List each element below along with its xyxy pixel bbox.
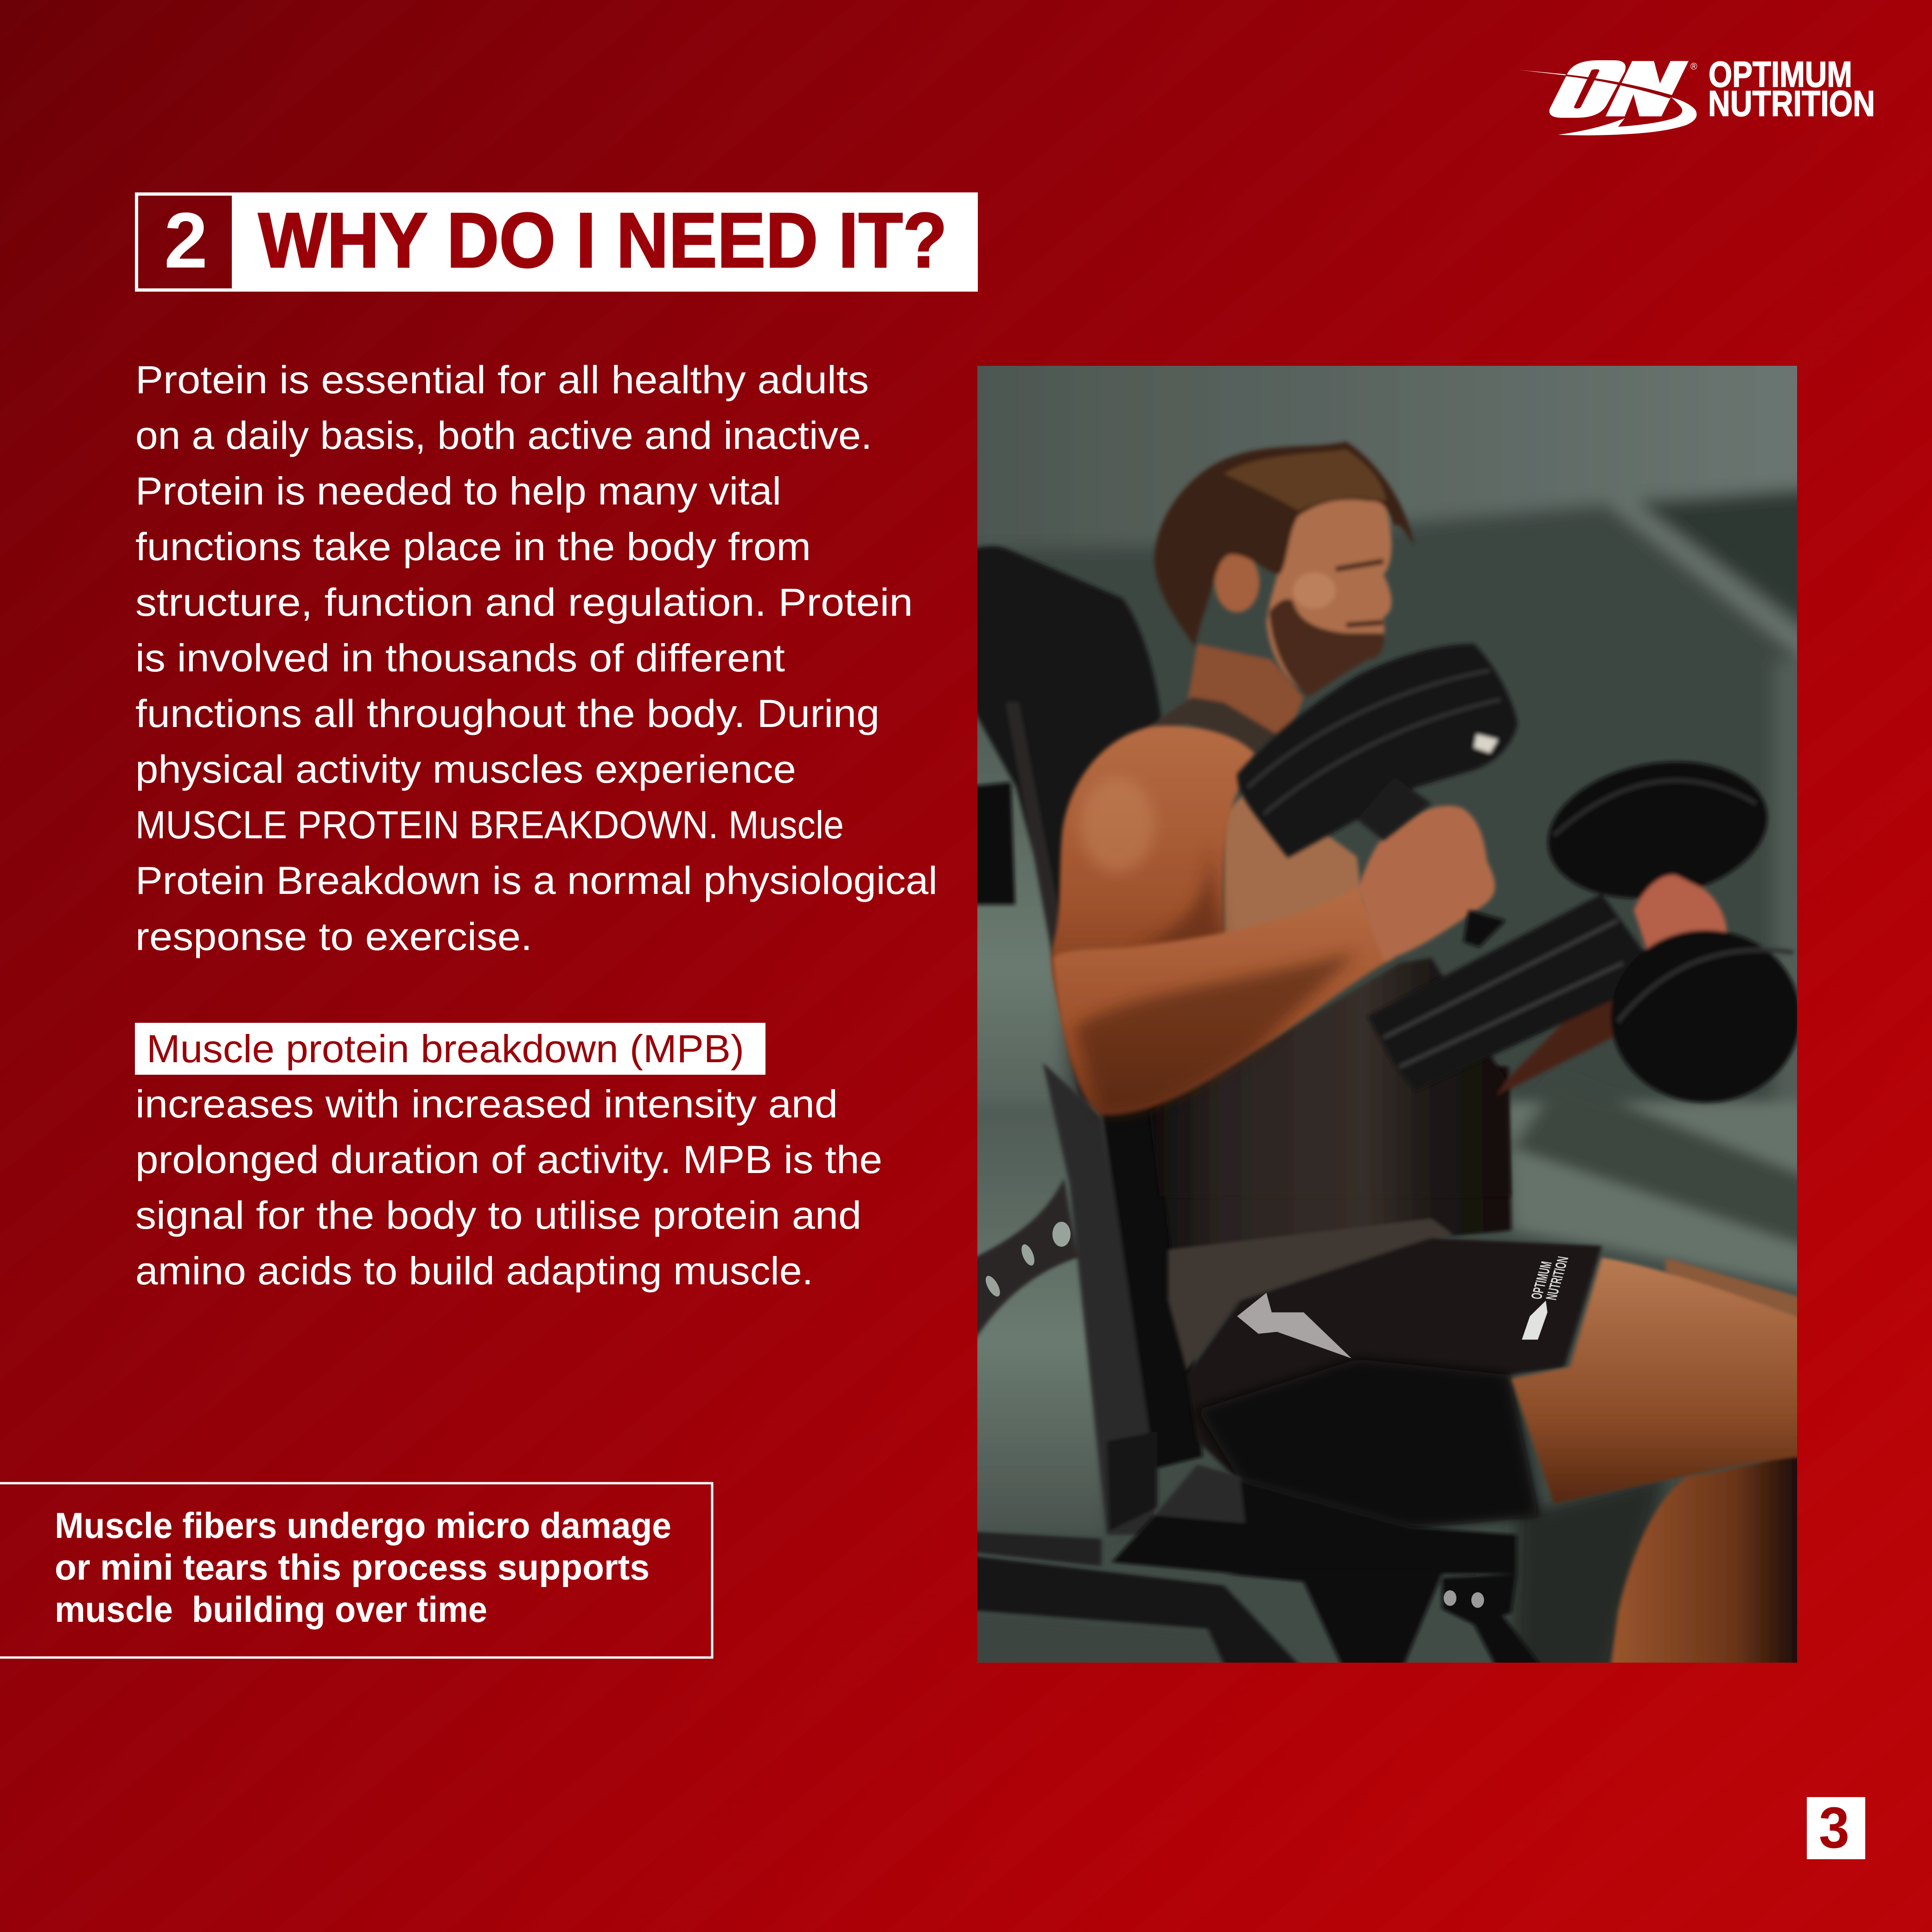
logo wordmark: NUTRITION [1708,83,1875,124]
photo lower part [947,1063,1825,1676]
callout: muscle fibers: muscle building over time [55,1589,487,1630]
body paragraph 1: Protein Breakdown is a normal physiological [135,859,937,902]
man: forearm [1053,889,1394,1115]
shirt hem [1149,1066,1511,1371]
bracket bolts [1444,1590,1484,1608]
photo: man lifting dumbbells [947,335,1825,1676]
body paragraph 2: prolonged duration of activity. MPB is the [135,1138,882,1181]
shorts: OPTIMUM [1527,1260,1556,1301]
callout: muscle fibers: or mini tears this process supports [55,1547,650,1588]
man: ear and head [1154,441,1415,697]
body paragraph 1: Protein is essential for all healthy adults [135,358,869,402]
logo: Optimum Nutrition [1518,54,1875,135]
body paragraph 1: physical activity muscles experience [135,747,796,791]
body paragraph 2: amino acids to build adapting muscle. [135,1249,813,1293]
heading background with number box [135,192,978,292]
heading text: WHY DO I NEED IT? [258,197,947,284]
photo upper figure [1052,441,1800,1196]
body paragraph 2 [135,1082,882,1293]
section number: 2 [164,197,208,285]
body paragraph 1: structure, function and regulation. Protein [135,580,913,624]
body paragraph 1: Protein is needed to help many vital [135,469,781,513]
body paragraph 1: response to exercise. [135,915,532,958]
body paragraph 1: functions take place in the body from [135,525,811,568]
body paragraph 1: MUSCLE PROTEIN BREAKDOWN. Muscle [135,803,844,847]
body paragraph 1: functions all throughout the body. During [135,692,880,735]
page number: 3 [1819,1796,1849,1860]
highlighted phrase: Muscle protein breakdown (MPB): Muscle protein breakdown (MPB) [147,1027,744,1071]
photo backdrop and bench back [977,366,1797,1107]
heading bar [135,192,978,292]
logo wordmark [1690,54,1875,124]
body paragraph 2: increases with increased intensity and [135,1082,838,1126]
logo wordmark: ® [1690,62,1697,72]
page number [1807,1796,1865,1860]
man: shoulder [1052,726,1256,1027]
callout: muscle fibers [0,1483,712,1658]
body paragraph 1 [135,358,937,958]
man: hand [1357,806,1495,961]
man: neck and strap [1128,644,1362,950]
dumbbell: upper [1237,644,1518,947]
body paragraph 1: on a daily basis, both active and inactive. [135,414,872,457]
shorts: NUTRITION [1543,1255,1572,1301]
logo mark: ON [1518,60,1696,135]
shorts [1186,1238,1602,1527]
body paragraph 2: signal for the body to utilise protein and [135,1193,861,1237]
thigh and shin [1511,1258,1825,1676]
man: torso [1149,958,1510,1196]
dumbbell: lower [1368,745,1800,1103]
callout: muscle fibers: Muscle fibers undergo micro damage [55,1505,671,1546]
logo wordmark: OPTIMUM [1709,54,1852,95]
seat and frame [958,1465,1549,1676]
bench strip and arc [963,1063,1203,1535]
body paragraph 1: is involved in thousands of different [135,636,785,680]
arc holes [983,1222,1071,1298]
